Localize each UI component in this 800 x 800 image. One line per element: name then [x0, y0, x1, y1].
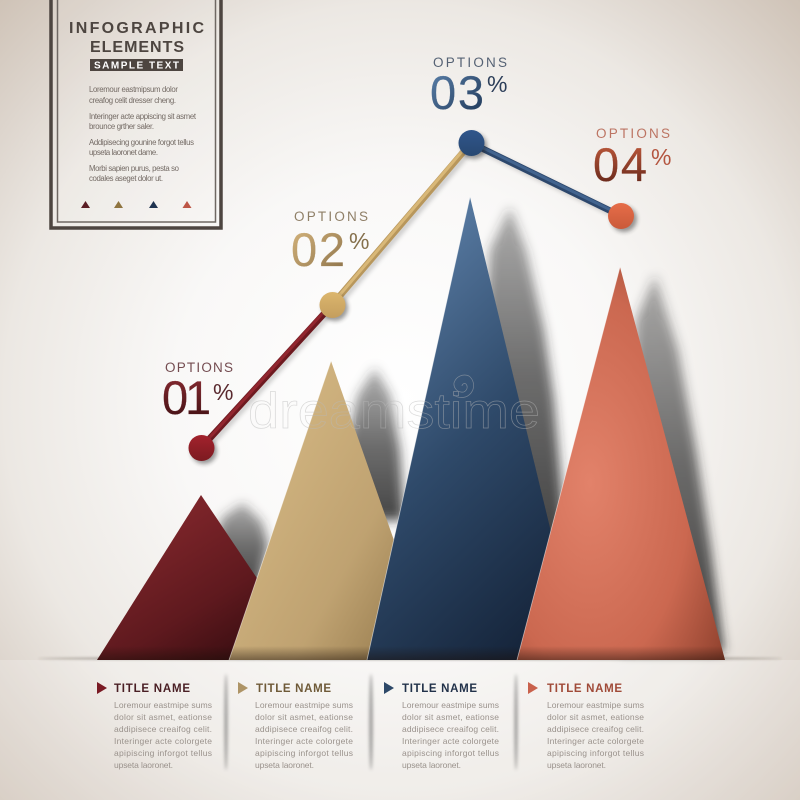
option label 02: % [349, 228, 369, 254]
line segment 01 [201, 304, 332, 448]
triangle shadows [200, 207, 724, 652]
option label 02: OPTIONS [294, 209, 368, 224]
title 3: TITLE NAME [402, 683, 477, 695]
panel heading [69, 20, 204, 56]
body 1 [114, 700, 212, 770]
node 02 [320, 292, 346, 318]
panel heading: ELEMENTS [90, 39, 184, 56]
body 3: Loremour eastmipe sums [402, 700, 499, 710]
body 4: apipiscing inforgot tellus [547, 748, 644, 758]
column 3 [384, 682, 499, 770]
panel text block: Addipisecing gounine forgot tellus [89, 138, 194, 147]
option label 04: 04 [593, 138, 647, 191]
triangle 03 [367, 197, 582, 660]
panel text block: creafog celit dresser cheng. [89, 96, 176, 105]
legend triangles [81, 201, 192, 208]
connector shadows [204, 146, 624, 451]
body 2 [255, 700, 353, 770]
node 01 [188, 435, 214, 461]
body 3: apipiscing inforgot tellus [402, 748, 499, 758]
title 4: TITLE NAME [547, 683, 622, 695]
watermark: dreamstime [248, 383, 540, 439]
body 2: dolor sit asmet, eationse [255, 712, 353, 722]
line segment 03 [471, 142, 621, 216]
node shadows [191, 133, 637, 464]
body 1: apipiscing inforgot tellus [114, 748, 212, 758]
option label 03: OPTIONS [433, 55, 507, 70]
panel text block: Morbi sapien purus, pesta so [89, 164, 180, 173]
node 04 [608, 203, 634, 229]
body 2: Interinger acte colorgete [255, 736, 353, 746]
triangle 02 [229, 361, 436, 660]
option label 04: % [651, 144, 671, 170]
column 4 [528, 682, 644, 770]
sample text badge: SAMPLE TEXT [94, 60, 179, 72]
option label 01: 0 [162, 371, 188, 424]
panel text block: upseta laoronet dame. [89, 148, 158, 157]
arrow icon 1 [97, 682, 107, 694]
option label 03: % [487, 71, 507, 97]
node 03 [458, 130, 484, 156]
body 1: upseta laoronet. [114, 760, 173, 770]
line chart [188, 130, 637, 464]
triangle 01 [97, 495, 312, 660]
column 1 [97, 682, 212, 770]
body 4: addipisece creaifog celit. [547, 724, 644, 734]
panel text block [89, 85, 197, 183]
body 3: dolor sit asmet, eationse [402, 712, 499, 722]
body 2: upseta laoronet. [255, 760, 314, 770]
body 1: addipisece creaifog celit. [114, 724, 212, 734]
triangle base band [97, 648, 725, 660]
panel text block: codales aseget dolor ut. [89, 174, 163, 183]
panel heading: INFOGRAPHIC [69, 20, 204, 37]
option label 01 [162, 360, 233, 424]
column dividers [224, 674, 518, 770]
arrow icon 4 [528, 682, 538, 694]
body 4 [547, 700, 644, 770]
panel text block: Interinger acte appiscing sit asmet [89, 112, 197, 121]
panel: infographic elements [51, 0, 221, 228]
triangle 04 [517, 267, 725, 660]
body 3: addipisece creaifog celit. [402, 724, 499, 734]
option label 04: OPTIONS [596, 126, 670, 141]
title 1: TITLE NAME [114, 683, 190, 695]
option label 03: 03 [430, 66, 484, 119]
base shadow [38, 657, 782, 660]
line segment 02 [332, 142, 471, 305]
body 2: addipisece creaifog celit. [255, 724, 353, 734]
option label 01: % [213, 379, 233, 405]
body 2: apipiscing inforgot tellus [255, 748, 353, 758]
body 3: Interinger acte colorgete [402, 736, 499, 746]
body 2: Loremour eastmipe sums [255, 700, 353, 710]
arrow icon 2 [238, 682, 248, 694]
option label 01: OPTIONS [165, 360, 233, 375]
body 4: Loremour eastmipe sums [547, 700, 644, 710]
body 1: Loremour eastmipe sums [114, 700, 212, 710]
option label 01: 1 [185, 371, 211, 424]
option label 02 [291, 209, 369, 276]
body 3 [402, 700, 499, 770]
panel text block: Loremour eastmipsum dolor [89, 85, 178, 94]
body 1: dolor sit asmet, eationse [114, 712, 212, 722]
triangle chart [90, 197, 730, 660]
column 2 [238, 682, 353, 770]
title 2: TITLE NAME [256, 683, 331, 695]
body 3: upseta laoronet. [402, 760, 461, 770]
body 4: Interinger acte colorgete [547, 736, 644, 746]
triangle edge highlights [229, 197, 620, 660]
option label 03 [430, 55, 507, 119]
panel text block: brounce grther saler. [89, 122, 154, 131]
arrow icon 3 [384, 682, 394, 694]
body 4: dolor sit asmet, eationse [547, 712, 644, 722]
body 1: Interinger acte colorgete [114, 736, 212, 746]
option label 02: 02 [291, 223, 345, 276]
body 4: upseta laoronet. [547, 760, 606, 770]
option label 04 [593, 126, 671, 191]
